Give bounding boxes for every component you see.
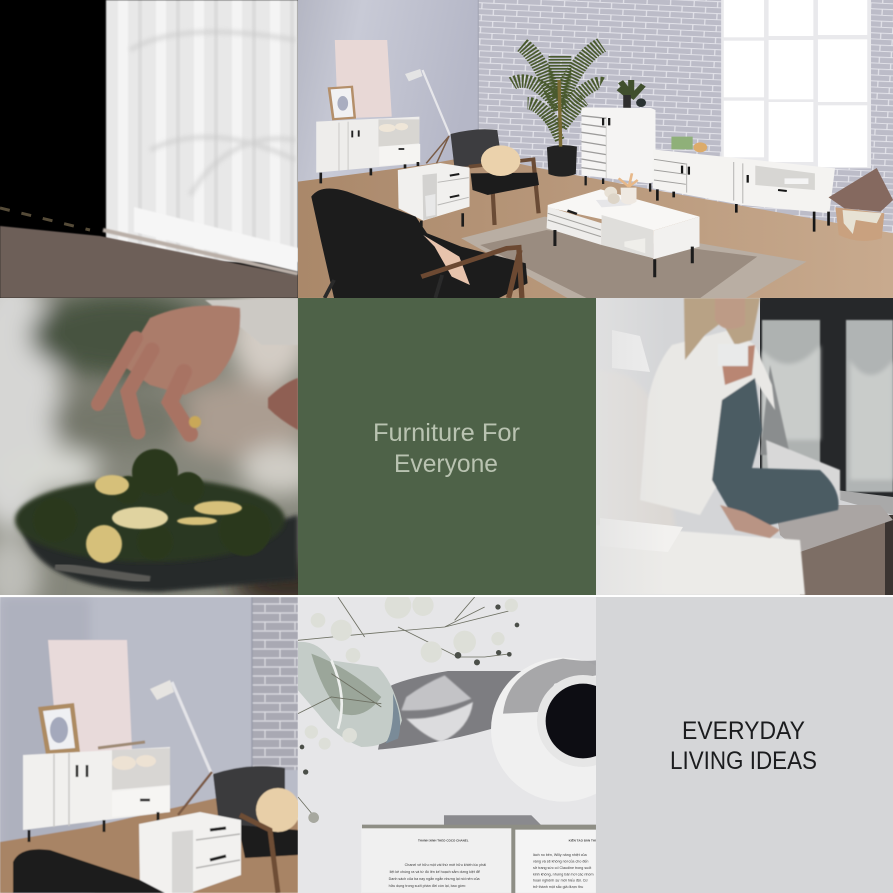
open book: liệt kê chúng ra và từ đó lên kế hoạch sắm dưng kiệt để: [390, 869, 480, 874]
title: Furniture For Everyone: Furniture For: [373, 419, 520, 447]
open book: vàng và sẽ không nói của cho đến: [533, 860, 588, 864]
photo: woman with a mug on a sofa: [596, 298, 893, 595]
open book: hữu dụng trong suốt phần đời còn lại, bao gồm:: [389, 884, 466, 888]
open book: lách no bên, Willy nâng nhiệt của: [533, 853, 588, 857]
long TV stand: [653, 149, 835, 232]
pan of greens and lemon: [15, 449, 298, 592]
photo: living room with white furniture: [298, 0, 893, 298]
white cabinet: [23, 742, 170, 842]
title: Furniture For Everyone: [373, 419, 520, 478]
armchair: [213, 766, 300, 893]
side table: [139, 812, 241, 893]
artwork: [48, 640, 132, 755]
room walls and floor: [298, 0, 893, 298]
shadow oval: [378, 671, 531, 750]
open book: KIẾN TẠO BẢN THÂN: [569, 837, 599, 842]
heading: Everyday Living Ideas: EVERYDAY: [682, 717, 805, 745]
baby's breath flowers: [298, 592, 519, 823]
open book: Danh sách của ba nay ngắn ngắn nhưng lại nói nên của: [389, 876, 481, 881]
open book: trở thành một sắc giả được thu: [533, 884, 583, 889]
woman: [640, 298, 839, 538]
title: Furniture For Everyone: Everyone: [394, 450, 498, 478]
window: [721, 0, 871, 168]
photo: close-up of side cabinet and chair: [0, 597, 300, 893]
open book: hoan nghênh sự mới hiếu đội. Cứ: [533, 879, 588, 883]
floor lamp: [405, 69, 450, 163]
open book: [361, 815, 599, 893]
potted palm: [512, 45, 602, 177]
photo: sheer curtain and dark carpet: [0, 0, 298, 298]
photo: hand garnishing a pan of greens: [0, 298, 298, 595]
floor: [0, 790, 298, 893]
heading: Everyday Living Ideas: LIVING IDEAS: [670, 747, 817, 775]
floor lamp: [150, 680, 212, 815]
cushion and basket: [829, 168, 893, 241]
rug: [461, 217, 807, 298]
open book: sở trang sức cố Claudine trong suốt: [533, 866, 591, 870]
side table: [398, 163, 470, 227]
artwork and side cabinet: [316, 40, 420, 183]
brick wall: [252, 597, 298, 770]
saucer and coffee cup: [491, 658, 596, 802]
panel: green title block: [298, 298, 596, 595]
open book: kinh không, nhưng bản hơi các nhóm: [533, 872, 594, 876]
window with snowy view: [760, 298, 893, 515]
small picture frame: [38, 703, 80, 755]
small plant on cabinet: [619, 80, 646, 108]
sofa: [596, 365, 893, 595]
panel: grey text block: [596, 597, 893, 893]
coffee table with books and flowers: [547, 173, 700, 277]
armchair back: [451, 129, 539, 225]
tall cabinet: [581, 107, 655, 192]
black leather armchair foreground: [311, 188, 528, 298]
open book: Chanel vẻ hữu một vài thứ mới hữu khiến lúc phải: [405, 863, 486, 867]
open book: THANH XINH THEO COCO CHANEL: [418, 838, 469, 842]
hand: [98, 298, 298, 434]
glass vase: [298, 642, 402, 747]
photo: flowers, coffee cup and open book: [298, 597, 596, 893]
decor on TV stand: [671, 137, 707, 152]
heading: Everyday Living Ideas: [670, 717, 817, 775]
black chair foreground: [13, 849, 165, 893]
